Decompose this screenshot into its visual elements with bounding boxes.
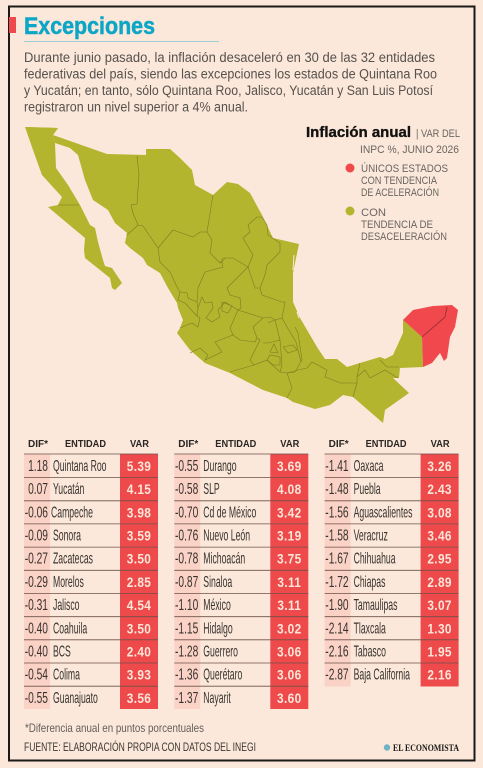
rows: 3.26 <box>427 458 452 474</box>
rows <box>175 457 302 707</box>
rows: 4.54 <box>127 597 151 613</box>
rows: -0.76 <box>175 526 198 544</box>
rows: 1.18 <box>28 457 48 475</box>
rows: 1.30 <box>427 621 452 636</box>
rows: Coahuila <box>53 620 87 637</box>
rows: 2.89 <box>427 574 452 590</box>
rows: -1.56 <box>325 503 349 521</box>
rows: -0.27 <box>25 550 48 567</box>
VAR column background <box>270 454 308 709</box>
map: green states <box>25 127 423 423</box>
rows: Morelos <box>53 573 84 591</box>
legend subtitle <box>360 128 460 156</box>
rows: -1.58 <box>325 526 349 544</box>
legend subtitle: INPC %, JUNIO 2026 <box>360 144 459 156</box>
intro text: Durante junio pasado, la inflación desaceleró en 30 de las 32 entidades <box>24 50 435 65</box>
rows: 2.40 <box>127 644 151 660</box>
rows: -1.36 <box>175 665 198 683</box>
rows: Durango <box>203 457 237 475</box>
logo icon <box>384 744 390 751</box>
rows: 3.11 <box>277 597 301 613</box>
rows: Baja California <box>354 666 410 683</box>
rows: 3.46 <box>427 528 452 544</box>
legend: red label: DE ACELERACIÓN <box>361 186 439 199</box>
rows: Querétaro <box>203 666 242 683</box>
rows: -0.31 <box>25 596 48 614</box>
legend heading: Inflación anual <box>306 125 411 141</box>
map: Yucatán / Quintana Roo border <box>422 307 447 337</box>
legend subtitle: | VAR DEL <box>416 128 460 140</box>
row lines <box>174 454 308 686</box>
DIF column background <box>174 454 200 709</box>
VAR column background <box>120 454 158 709</box>
legend: red label: ÚNICOS ESTADOS <box>361 162 448 175</box>
DIF column background <box>325 454 351 686</box>
map: state borders <box>58 156 399 398</box>
rows: SLP <box>203 481 220 498</box>
rows: -1.67 <box>325 550 349 567</box>
logo wordmark: EL ECONOMISTA <box>393 744 459 754</box>
header row: ENTIDAD <box>215 438 257 450</box>
header row: DIF* <box>178 438 199 450</box>
rows: -1.28 <box>175 642 198 660</box>
source: FUENTE: ELABORACIÓN PROPIA CON DATOS DEL INEGI <box>24 741 256 754</box>
title: Excepciones <box>24 13 155 40</box>
rows: 3.56 <box>127 690 151 706</box>
rows: -1.37 <box>175 689 198 706</box>
rows: 3.59 <box>127 528 151 544</box>
title rule <box>24 41 219 42</box>
rows: 3.50 <box>127 551 151 567</box>
header row: VAR <box>130 438 149 450</box>
legend: green dot <box>346 206 354 216</box>
rows: Sinaloa <box>203 573 232 591</box>
rows: -0.09 <box>25 526 48 544</box>
rows: 3.69 <box>277 458 302 474</box>
rows: Tabasco <box>354 643 386 660</box>
header row <box>329 438 450 450</box>
rows: Cd de México <box>203 504 256 521</box>
legend: red label: CON TENDENCIA <box>361 175 438 187</box>
rows <box>325 457 452 683</box>
rows: 3.07 <box>427 597 452 613</box>
rows: Michoacán <box>203 550 245 567</box>
rows: Tamaulipas <box>354 597 397 614</box>
rows: 3.19 <box>277 528 302 544</box>
rows: 3.02 <box>277 621 302 636</box>
rows: 5.39 <box>127 458 151 474</box>
legend: green label: DESACELERACIÓN <box>361 230 447 243</box>
rows: BCS <box>53 643 71 660</box>
legend: red label <box>361 162 448 199</box>
rows: 3.42 <box>277 505 302 521</box>
rows: 3.75 <box>277 551 302 567</box>
rows: -0.40 <box>25 642 48 660</box>
intro text: y Yucatán; en tanto, sólo Quintana Roo, Jalisco, Yucatán y San Luis Potosí <box>24 83 433 98</box>
rows: 3.06 <box>277 667 302 683</box>
rows: Veracruz <box>354 527 388 544</box>
rows: 3.98 <box>127 505 151 521</box>
rows: Tlaxcala <box>354 620 386 637</box>
row lines <box>24 454 158 686</box>
header row: VAR <box>431 438 450 450</box>
rows: 2.16 <box>427 667 452 683</box>
rows: Nayarit <box>203 689 231 707</box>
table column 3 <box>325 438 459 686</box>
rows: Guerrero <box>203 643 238 660</box>
map: coastal lagoons <box>293 255 299 318</box>
rows: -0.55 <box>175 457 198 475</box>
rows: Sonora <box>53 527 81 544</box>
header row: ENTIDAD <box>366 438 407 450</box>
footnote: *Diferencia anual en puntos porcentuales <box>25 721 204 735</box>
DIF column background <box>24 454 50 709</box>
rows: -0.40 <box>25 619 48 637</box>
table column 2 <box>174 438 308 709</box>
rows: Chihuahua <box>354 550 396 567</box>
rows: 3.06 <box>277 644 302 660</box>
intro text: registraron un nivel superior a 4% anual. <box>24 100 248 114</box>
rows: Nuevo León <box>203 527 250 544</box>
rows: 2.95 <box>427 551 452 567</box>
rows: 4.08 <box>277 481 302 497</box>
rows: 2.85 <box>127 574 151 590</box>
rows: 4.15 <box>127 481 151 497</box>
rows: -0.87 <box>175 573 198 590</box>
map: red states Yucatán and Quintana Roo <box>403 305 458 367</box>
intro text: federativas del país, siendo las excepciones los estados de Quintana Roo <box>24 66 437 82</box>
rows: -0.78 <box>175 550 198 567</box>
legend: red dot <box>346 164 354 172</box>
rows: -0.70 <box>175 503 198 521</box>
rows: 1.95 <box>427 644 452 660</box>
rows: -2.14 <box>325 619 349 637</box>
rows: -0.55 <box>25 689 48 706</box>
title marker <box>9 17 16 33</box>
rows: Quintana Roo <box>53 457 107 475</box>
header row: VAR <box>280 438 300 450</box>
rows: México <box>203 597 231 614</box>
rows: -1.41 <box>325 457 349 475</box>
rows: Yucatán <box>53 481 84 498</box>
table column 1 <box>24 438 158 709</box>
rows: -1.48 <box>325 480 349 498</box>
VAR column background <box>421 454 459 686</box>
rows: -1.10 <box>175 596 198 614</box>
rows: 3.08 <box>427 505 452 521</box>
rows: -0.06 <box>25 503 48 521</box>
rows: Hidalgo <box>203 620 233 637</box>
legend: green label <box>361 207 447 243</box>
rows: -1.90 <box>325 596 349 614</box>
rows: -1.15 <box>175 619 198 637</box>
rows: 2.43 <box>427 481 452 497</box>
rows: Zacatecas <box>53 550 93 567</box>
rows: Campeche <box>51 504 93 521</box>
logo: El Economista <box>384 744 459 754</box>
rows: -2.87 <box>325 665 349 683</box>
rows: -0.29 <box>25 573 48 590</box>
map: Baja California peninsula <box>25 127 122 290</box>
rows: -0.54 <box>25 665 48 683</box>
row lines <box>325 454 459 663</box>
rows: Colima <box>53 666 80 683</box>
intro text <box>24 50 437 114</box>
rows: 3.11 <box>277 574 301 590</box>
rows: 0.07 <box>28 480 48 498</box>
rows: -1.72 <box>325 573 349 590</box>
legend: green label: CON <box>361 207 386 219</box>
rows: -2.16 <box>325 642 349 660</box>
rows: Guanajuato <box>53 689 98 707</box>
rows: Aguascalientes <box>354 504 412 521</box>
rows: Jalisco <box>53 597 80 614</box>
header row: DIF* <box>329 438 349 450</box>
rows: 3.50 <box>127 621 151 636</box>
header row: ENTIDAD <box>65 438 106 450</box>
rows: Chiapas <box>354 573 385 591</box>
rows <box>25 457 151 707</box>
header row: DIF* <box>28 438 49 450</box>
header row <box>178 438 300 450</box>
rows: Puebla <box>354 481 381 498</box>
header row <box>28 438 149 450</box>
legend: green label: TENDENCIA DE <box>361 219 433 231</box>
rows: 3.60 <box>277 690 302 706</box>
rows: 3.93 <box>127 667 151 683</box>
legend <box>306 125 460 243</box>
map of Mexico <box>25 127 458 423</box>
rows: Oaxaca <box>354 457 383 475</box>
rows: -0.58 <box>175 480 198 498</box>
